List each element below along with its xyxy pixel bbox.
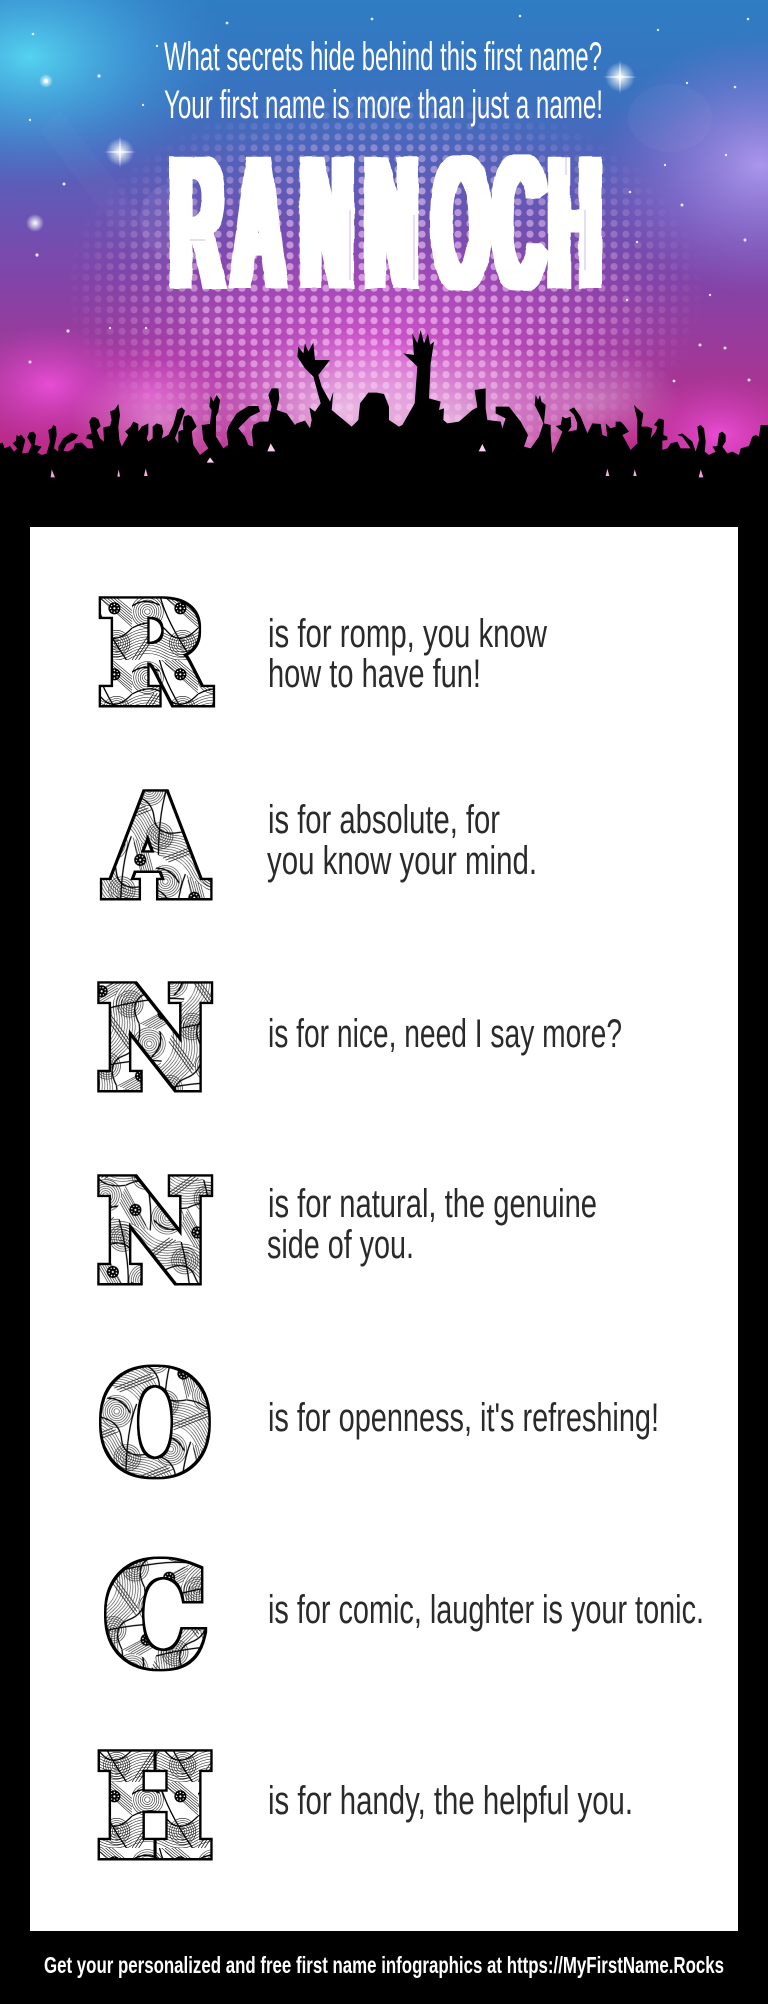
text: N meaning: is for natural, the genuine <box>268 1182 597 1226</box>
heading: tagline <box>164 35 603 127</box>
row H <box>99 1730 633 1885</box>
icon: letter N: N <box>99 1155 211 1310</box>
text: A meaning: you know your mind. <box>267 839 537 883</box>
icon: letter H: H <box>99 1730 211 1885</box>
text: N meaning <box>267 1182 597 1267</box>
row N <box>99 962 622 1117</box>
icon: letter A: A <box>106 770 205 925</box>
row N second <box>99 1155 597 1310</box>
title: RANNOCH: RANNOCH <box>171 117 600 329</box>
text: R meaning: how to have fun! <box>268 652 481 696</box>
text: R meaning <box>268 612 547 696</box>
panel: letters list <box>30 527 738 1931</box>
row R <box>100 577 547 732</box>
row A <box>106 770 537 925</box>
icon: letter O: O <box>101 1347 209 1502</box>
text: A meaning <box>267 798 537 883</box>
crowd silhouette <box>0 330 768 530</box>
text: R meaning: is for romp, you know <box>268 612 547 656</box>
text: A meaning: is for absolute, for <box>268 798 500 842</box>
row O <box>101 1347 659 1502</box>
text: N meaning: is for nice, need I say more? <box>268 1012 622 1056</box>
text: H meaning: is for handy, the helpful you. <box>268 1779 633 1823</box>
icon: letter C: C <box>106 1539 205 1694</box>
text: N meaning: side of you. <box>267 1223 414 1267</box>
header banner: concert lights background <box>0 0 768 455</box>
stars and sparkles <box>26 15 750 382</box>
icon: letter N: N <box>99 962 211 1117</box>
row C <box>106 1539 704 1694</box>
icon: letter R: R <box>100 577 208 732</box>
